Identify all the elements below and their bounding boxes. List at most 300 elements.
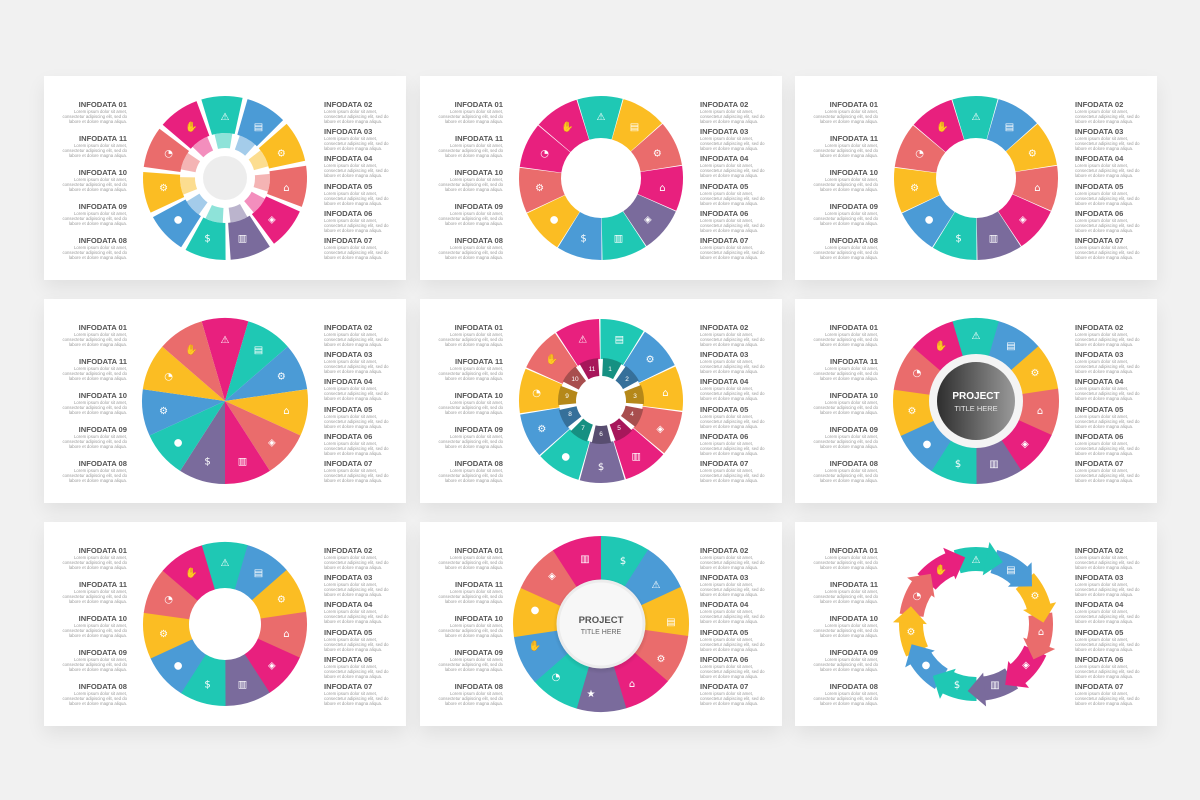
panel: card 6 project dark: Lorem ipsum dolor sit amet, xyxy=(825,332,878,337)
center: project title dark xyxy=(929,354,1023,448)
icons: wheel segments: $ xyxy=(204,234,211,244)
panel: card 3 chevron ring: consectetur adipiscing elit, sed do xyxy=(1075,223,1140,228)
icons: puzzle segments: ⚠ xyxy=(652,580,661,591)
panel: card 5 numbered ring: labore et dolore magna aliqua. xyxy=(445,444,503,449)
panel: card 6 project dark: labore et dolore magna aliqua. xyxy=(820,342,878,347)
panel: card 4 pie: INFODATA 03 xyxy=(324,350,372,359)
panel: card 1 wheel: consectetur adipiscing elit, sed do xyxy=(324,141,388,146)
panel: card 7 puzzle ring: consectetur adipiscing elit, sed do xyxy=(324,696,388,701)
panel: card 4 pie: INFODATA 10 xyxy=(79,391,127,400)
panel: card 9 arrow cycle: INFODATA 06 xyxy=(1075,655,1123,664)
panel: card 5 numbered ring: INFODATA 10 xyxy=(455,391,503,400)
panel: card 9 arrow cycle: INFODATA 05 xyxy=(1075,628,1123,637)
panel: card 1 wheel: INFODATA 07 xyxy=(324,236,372,245)
panel: card 1 wheel: labore et dolore magna aliqua. xyxy=(324,173,382,178)
chart: puzzle ring with white center xyxy=(512,536,690,712)
icons: chevron segments: ▤ xyxy=(1005,122,1014,133)
panel: card 5 numbered ring: consectetur adipiscing elit, sed do xyxy=(438,371,503,376)
panel: card 7 puzzle ring: Lorem ipsum dolor sit amet, xyxy=(324,691,377,696)
panel: card 9 arrow cycle: Lorem ipsum dolor sit amet, xyxy=(1075,637,1128,642)
icons: pie segments: ● xyxy=(174,438,183,449)
panel: card 7 puzzle ring: labore et dolore magna aliqua. xyxy=(324,592,382,597)
panel: card 1 wheel: consectetur adipiscing elit, sed do xyxy=(62,250,127,255)
icons: puzzle segments: ◈ xyxy=(548,571,556,582)
panel: card 1 wheel: Lorem ipsum dolor sit amet, xyxy=(324,218,377,223)
panel: card 9 arrow cycle: Lorem ipsum dolor sit amet, xyxy=(1075,691,1128,696)
panel: card 1 wheel: labore et dolore magna aliqua. xyxy=(69,119,127,124)
panel: card 9 arrow cycle: Lorem ipsum dolor sit amet, xyxy=(825,657,878,662)
panel: card 3 chevron ring: consectetur adipiscing elit, sed do xyxy=(1075,114,1140,119)
panel: card 6 project dark: labore et dolore magna aliqua. xyxy=(1075,342,1133,347)
panel: card 2 donut: INFODATA 11 xyxy=(455,134,503,143)
panel: card 4 pie: labore et dolore magna aliqua. xyxy=(324,369,382,374)
panel: card 8 puzzle with project title: INFODATA 04 xyxy=(700,600,748,609)
panel: card 3 chevron ring: INFODATA 06 xyxy=(1075,209,1123,218)
panel: card 8 puzzle with project title: consectetur adipiscing elit, sed do xyxy=(438,594,503,599)
icons: numbered segments: ▤ xyxy=(615,335,624,346)
panel: card 6 project dark: INFODATA 11 xyxy=(830,357,878,366)
icons: numbered segments: ◈ xyxy=(656,424,664,435)
panel: card 4 pie: consectetur adipiscing elit, sed do xyxy=(62,473,127,478)
panel: card 3 chevron ring: INFODATA 01 xyxy=(830,100,878,109)
panel: card 4 pie: consectetur adipiscing elit, sed do xyxy=(62,337,127,342)
center: project title dark: PROJECT xyxy=(952,391,1000,402)
panel: card 6 project dark: consectetur adipiscing elit, sed do xyxy=(1075,337,1140,342)
icons: donut segments: ⚙ xyxy=(535,183,544,194)
chart: numbered ring xyxy=(518,319,684,483)
panel: card 7 puzzle ring: INFODATA 02 xyxy=(324,546,372,555)
panel: card 4 pie: INFODATA 01 xyxy=(79,323,127,332)
panel: card 5 numbered ring: INFODATA 11 xyxy=(455,357,503,366)
panel: card 6 project dark: Lorem ipsum dolor sit amet, xyxy=(1075,414,1128,419)
panel: card 7 puzzle ring: consectetur adipiscing elit, sed do xyxy=(324,560,388,565)
panel: card 5 numbered ring: Lorem ipsum dolor sit amet, xyxy=(700,414,753,419)
panel: card 9 arrow cycle: consectetur adipiscing elit, sed do xyxy=(814,696,878,701)
icons: puzzle segments: ⚠ xyxy=(221,558,230,569)
panel: card 1 wheel: labore et dolore magna aliqua. xyxy=(324,255,382,260)
panel: card 2 donut: Lorem ipsum dolor sit amet, xyxy=(700,191,753,196)
panel: card 7 puzzle ring: consectetur adipiscing elit, sed do xyxy=(324,642,388,647)
panel: card 8 puzzle with project title: labore et dolore magna aliqua. xyxy=(445,633,503,638)
panel: card 3 chevron ring: consectetur adipiscing elit, sed do xyxy=(814,114,878,119)
panel: card 2 donut: Lorem ipsum dolor sit amet, xyxy=(700,218,753,223)
panel: card 2 donut: Lorem ipsum dolor sit amet, xyxy=(700,163,753,168)
numbers: segment indices: 5 xyxy=(617,425,621,432)
panel: card 3 chevron ring: consectetur adipiscing elit, sed do xyxy=(1075,196,1140,201)
panel: card 4 pie: labore et dolore magna aliqua. xyxy=(69,444,127,449)
icons: pie segments: $ xyxy=(204,456,211,468)
icons: numbered segments: ◔ xyxy=(532,388,541,399)
panel: card 5 numbered ring: Lorem ipsum dolor sit amet, xyxy=(700,332,753,337)
panel: card 7 puzzle ring: labore et dolore magna aliqua. xyxy=(69,667,127,672)
panel: card 6 project dark: INFODATA 10 xyxy=(830,391,878,400)
panel: card 2 donut: labore et dolore magna aliqua. xyxy=(700,228,758,233)
panel: card 1 wheel: Lorem ipsum dolor sit amet, xyxy=(324,136,377,141)
panel: card 4 pie: labore et dolore magna aliqua. xyxy=(69,342,127,347)
icons: arrow segments: ◈ xyxy=(1022,660,1030,671)
panel: card 2 donut xyxy=(420,76,782,280)
icons: chevron segments: ⚠ xyxy=(972,112,981,123)
panel: card 7 puzzle ring: labore et dolore magna aliqua. xyxy=(69,599,127,604)
panel: card 3 chevron ring: labore et dolore magna aliqua. xyxy=(1075,228,1133,233)
icons: puzzle segments: ▤ xyxy=(254,568,263,579)
icons: arrow segments: ▥ xyxy=(990,680,1000,691)
panel: card 4 pie: INFODATA 11 xyxy=(79,357,127,366)
panel: card 5 numbered ring: consectetur adipiscing elit, sed do xyxy=(700,473,764,478)
panel: card 4 pie: INFODATA 05 xyxy=(324,405,372,414)
panel: card 3 chevron ring: Lorem ipsum dolor sit amet, xyxy=(825,143,878,148)
panel: card 8 puzzle with project title: INFODATA 10 xyxy=(455,614,503,623)
panel: card 8 puzzle with project title: Lorem ipsum dolor sit amet, xyxy=(700,664,753,669)
icons: wheel segments: ● xyxy=(174,215,183,226)
panel: card 6 project dark: labore et dolore magna aliqua. xyxy=(1075,451,1133,456)
icons: ring segments: ▥ xyxy=(989,459,999,470)
panel: card 6 project dark: INFODATA 05 xyxy=(1075,405,1123,414)
icons: donut segments: ⌂ xyxy=(659,183,666,194)
text block: left items xyxy=(814,100,878,260)
panel: card 8 puzzle with project title: INFODATA 02 xyxy=(700,546,748,555)
panel: card 9 arrow cycle: INFODATA 09 xyxy=(830,648,878,657)
panel: card 7 puzzle ring: INFODATA 10 xyxy=(79,614,127,623)
panel: card 8 puzzle with project title: labore et dolore magna aliqua. xyxy=(700,674,758,679)
panel: card 7 puzzle ring: labore et dolore magna aliqua. xyxy=(324,701,382,706)
panel: card 7 puzzle ring: INFODATA 06 xyxy=(324,655,372,664)
panel: card 7 puzzle ring: Lorem ipsum dolor sit amet, xyxy=(74,691,127,696)
panel: card 8 puzzle with project title: consectetur adipiscing elit, sed do xyxy=(438,628,503,633)
icons: donut segments: ◔ xyxy=(540,148,549,159)
panel: card 2 donut: INFODATA 03 xyxy=(700,127,748,136)
panel: card 9 arrow cycle: Lorem ipsum dolor sit amet, xyxy=(825,589,878,594)
icons: arrow segments: ⚙ xyxy=(907,627,915,638)
panel: card 9 arrow cycle: labore et dolore magna aliqua. xyxy=(820,565,878,570)
text block: right items xyxy=(1075,546,1140,706)
icons: ring segments: $ xyxy=(955,459,961,470)
panel: card 8 puzzle with project title: Lorem ipsum dolor sit amet, xyxy=(700,691,753,696)
panel: card 8 puzzle with project title: labore et dolore magna aliqua. xyxy=(700,592,758,597)
text block: left items xyxy=(62,323,127,483)
panel: card 9 arrow cycle: Lorem ipsum dolor sit amet, xyxy=(825,691,878,696)
icons: donut segments: ⚠ xyxy=(597,112,606,123)
panel: card 8 puzzle with project title: labore et dolore magna aliqua. xyxy=(700,619,758,624)
panel: card 3 chevron ring: labore et dolore magna aliqua. xyxy=(1075,173,1133,178)
icons: pie segments: ⚠ xyxy=(221,335,230,346)
panel: card 5 numbered ring: labore et dolore magna aliqua. xyxy=(700,478,758,483)
panel: card 2 donut: consectetur adipiscing elit, sed do xyxy=(700,196,764,201)
panel: card 9 arrow cycle: INFODATA 07 xyxy=(1075,682,1123,691)
panel: card 1 wheel: Lorem ipsum dolor sit amet, xyxy=(74,109,127,114)
panel: card 3 chevron ring: labore et dolore magna aliqua. xyxy=(820,119,878,124)
icons: wheel segments: ▥ xyxy=(238,234,247,244)
panel: card 9 arrow cycle: labore et dolore magna aliqua. xyxy=(820,701,878,706)
panel: card 1 wheel: Lorem ipsum dolor sit amet, xyxy=(324,109,377,114)
panel: card 2 donut: consectetur adipiscing elit, sed do xyxy=(438,182,503,187)
panel: card 9 arrow cycle: labore et dolore magna aliqua. xyxy=(820,667,878,672)
panel: card 8 puzzle with project title: labore et dolore magna aliqua. xyxy=(445,599,503,604)
icons: puzzle segments: ⌂ xyxy=(283,629,290,640)
panel: card 4 pie: labore et dolore magna aliqua. xyxy=(69,478,127,483)
panel: card 8 puzzle with project title: INFODATA 03 xyxy=(700,573,748,582)
panel: card 6 project dark: consectetur adipiscing elit, sed do xyxy=(1075,473,1140,478)
panel: card 1 wheel: INFODATA 06 xyxy=(324,209,372,218)
panel: card 4 pie: consectetur adipiscing elit, sed do xyxy=(324,391,388,396)
icons: puzzle segments: ◔ xyxy=(552,672,560,683)
icons: ring segments: ✋ xyxy=(935,339,947,352)
panel: card 2 donut: Lorem ipsum dolor sit amet, xyxy=(700,245,753,250)
panel: card 4 pie: consectetur adipiscing elit, sed do xyxy=(324,419,388,424)
panel: card 7 puzzle ring: INFODATA 08 xyxy=(79,682,127,691)
panel: card 9 arrow cycle: consectetur adipiscing elit, sed do xyxy=(1075,560,1140,565)
panel: card 8 puzzle with project title: INFODATA 08 xyxy=(455,682,503,691)
panel: card 5 numbered ring: INFODATA 04 xyxy=(700,377,748,386)
panel: card 2 donut: consectetur adipiscing elit, sed do xyxy=(700,223,764,228)
panel: card 5 numbered ring: labore et dolore magna aliqua. xyxy=(700,342,758,347)
panel: card 2 donut: INFODATA 10 xyxy=(455,168,503,177)
numbers: segment indices: 10 xyxy=(571,376,579,383)
text block: left items xyxy=(438,100,503,260)
panel: card 6 project dark: labore et dolore magna aliqua. xyxy=(820,410,878,415)
panel: card 3 chevron ring: Lorem ipsum dolor sit amet, xyxy=(825,211,878,216)
panel: card 3 chevron ring: consectetur adipiscing elit, sed do xyxy=(1075,141,1140,146)
icons: wheel segments: ◔ xyxy=(164,148,173,159)
panel: card 4 pie: labore et dolore magna aliqua. xyxy=(324,424,382,429)
icons: pie segments: ⚙ xyxy=(277,371,286,382)
icons: donut segments xyxy=(535,112,666,244)
panel: card 9 arrow cycle: Lorem ipsum dolor sit amet, xyxy=(825,623,878,628)
panel: card 7 puzzle ring: consectetur adipiscing elit, sed do xyxy=(62,662,127,667)
panel: card 8 puzzle with project title: consectetur adipiscing elit, sed do xyxy=(700,560,764,565)
panel: card 7 puzzle ring: Lorem ipsum dolor sit amet, xyxy=(74,623,127,628)
panel: card 5 numbered ring: Lorem ipsum dolor sit amet, xyxy=(700,441,753,446)
icons: ring segments: ⚙ xyxy=(1031,368,1039,379)
panel: card 9 arrow cycle: labore et dolore magna aliqua. xyxy=(1075,674,1133,679)
panel: card 1 wheel: consectetur adipiscing elit, sed do xyxy=(324,196,388,201)
panel: card 8 puzzle with project title: INFODATA 05 xyxy=(700,628,748,637)
panel: card 4 pie: consectetur adipiscing elit, sed do xyxy=(62,405,127,410)
icons: arrow segments: ▤ xyxy=(1006,565,1016,576)
panel: card 3 chevron ring: Lorem ipsum dolor sit amet, xyxy=(825,245,878,250)
panel: card 5 numbered ring: consectetur adipiscing elit, sed do xyxy=(700,364,764,369)
panel: card 2 donut: consectetur adipiscing elit, sed do xyxy=(438,148,503,153)
panel: card 5 numbered ring: labore et dolore magna aliqua. xyxy=(445,410,503,415)
icons: chevron segments: ⌂ xyxy=(1034,183,1041,194)
icons: arrow segments: ◔ xyxy=(913,591,921,602)
panel: card 6 project dark: consectetur adipiscing elit, sed do xyxy=(1075,391,1140,396)
panel: card 5 numbered ring: labore et dolore magna aliqua. xyxy=(700,424,758,429)
panel: card 6 project dark: INFODATA 09 xyxy=(830,425,878,434)
text block: right items xyxy=(324,100,388,260)
panel: card 5 numbered ring: Lorem ipsum dolor sit amet, xyxy=(450,400,503,405)
panel: card 2 donut: labore et dolore magna aliqua. xyxy=(445,153,503,158)
panel: card 7 puzzle ring: labore et dolore magna aliqua. xyxy=(324,565,382,570)
panel: card 5 numbered ring: labore et dolore magna aliqua. xyxy=(445,376,503,381)
panel: card 5 numbered ring: Lorem ipsum dolor sit amet, xyxy=(450,366,503,371)
icons: numbered segments: ● xyxy=(561,452,570,463)
panel: card 9 arrow cycle: Lorem ipsum dolor sit amet, xyxy=(1075,609,1128,614)
icons: ring segments: ⌂ xyxy=(1037,406,1043,417)
panel: card 7 puzzle ring: labore et dolore magna aliqua. xyxy=(324,674,382,679)
panel: card 4 pie: Lorem ipsum dolor sit amet, xyxy=(324,441,377,446)
panel: card 4 pie: Lorem ipsum dolor sit amet, xyxy=(324,468,377,473)
numbers: segment indices: 11 xyxy=(589,366,596,373)
panel: card 1 wheel: consectetur adipiscing elit, sed do xyxy=(324,250,388,255)
panel: card 8 puzzle with project title: consectetur adipiscing elit, sed do xyxy=(438,560,503,565)
panel: card 1 wheel: INFODATA 02 xyxy=(324,100,372,109)
panel: card 6 project dark: labore et dolore magna aliqua. xyxy=(1075,369,1133,374)
icons: puzzle segments xyxy=(529,554,676,700)
panel: card 6 project dark: consectetur adipiscing elit, sed do xyxy=(814,439,878,444)
panel: card 7 puzzle ring: consectetur adipiscing elit, sed do xyxy=(62,560,127,565)
panel: card 3 chevron ring: INFODATA 02 xyxy=(1075,100,1123,109)
panel: card 3 chevron ring: labore et dolore magna aliqua. xyxy=(820,221,878,226)
panel: card 9 arrow cycle: Lorem ipsum dolor sit amet, xyxy=(1075,664,1128,669)
panel: card 7 puzzle ring: INFODATA 01 xyxy=(79,546,127,555)
panel: card 3 chevron ring: consectetur adipiscing elit, sed do xyxy=(1075,168,1140,173)
panel: card 2 donut: consectetur adipiscing elit, sed do xyxy=(438,216,503,221)
panel: card 2 donut: consectetur adipiscing elit, sed do xyxy=(438,114,503,119)
panel: card 4 pie: INFODATA 06 xyxy=(324,432,372,441)
panel: card 4 pie: labore et dolore magna aliqua. xyxy=(69,376,127,381)
panel: card 7 puzzle ring: INFODATA 03 xyxy=(324,573,372,582)
panel: card 5 numbered ring: consectetur adipiscing elit, sed do xyxy=(438,473,503,478)
panel: card 9 arrow cycle: labore et dolore magna aliqua. xyxy=(1075,619,1133,624)
panel: card 1 wheel: labore et dolore magna aliqua. xyxy=(69,187,127,192)
chart: full pie xyxy=(142,318,308,484)
panel: card 4 pie: Lorem ipsum dolor sit amet, xyxy=(74,332,127,337)
panel: card 7 puzzle ring: labore et dolore magna aliqua. xyxy=(324,647,382,652)
panel: card 9 arrow cycle: labore et dolore magna aliqua. xyxy=(1075,647,1133,652)
text block: left items xyxy=(814,323,878,483)
panel: card 3 chevron ring: Lorem ipsum dolor sit amet, xyxy=(1075,163,1128,168)
icons: chevron segments xyxy=(910,112,1041,244)
panel: card 7 puzzle ring: INFODATA 09 xyxy=(79,648,127,657)
panel: card 9 arrow cycle: Lorem ipsum dolor sit amet, xyxy=(1075,555,1128,560)
panel: card 8 puzzle with project title: labore et dolore magna aliqua. xyxy=(445,701,503,706)
panel: card 3 chevron ring: Lorem ipsum dolor sit amet, xyxy=(825,109,878,114)
text block: right items xyxy=(1075,100,1140,260)
panel: card 5 numbered ring: Lorem ipsum dolor sit amet, xyxy=(700,386,753,391)
panel: card 9 arrow cycle: consectetur adipiscing elit, sed do xyxy=(1075,669,1140,674)
panel: card 2 donut: INFODATA 05 xyxy=(700,182,748,191)
panel: card 4 pie: Lorem ipsum dolor sit amet, xyxy=(74,468,127,473)
panel: card 5 numbered ring: INFODATA 06 xyxy=(700,432,748,441)
panel: card 7 puzzle ring: Lorem ipsum dolor sit amet, xyxy=(74,657,127,662)
panel: card 8 puzzle with project title: Lorem ipsum dolor sit amet, xyxy=(450,691,503,696)
chart: arrow cycle ring xyxy=(893,542,1056,706)
panel: card 3 chevron ring: Lorem ipsum dolor sit amet, xyxy=(1075,191,1128,196)
icons: chevron segments: ◔ xyxy=(915,148,924,159)
panel: card 8 puzzle with project title: Lorem ipsum dolor sit amet, xyxy=(450,657,503,662)
panel: card 6 project dark: labore et dolore magna aliqua. xyxy=(1075,424,1133,429)
panel: card 4 pie: Lorem ipsum dolor sit amet, xyxy=(74,434,127,439)
icons: puzzle segments: ⚙ xyxy=(657,654,665,665)
icons: arrow segments xyxy=(907,555,1044,691)
panel: card 2 donut: labore et dolore magna aliqua. xyxy=(700,255,758,260)
panel: card 1 wheel: consectetur adipiscing elit, sed do xyxy=(324,114,388,119)
panel: card 7 puzzle ring: labore et dolore magna aliqua. xyxy=(69,565,127,570)
panel: card 4 pie: consectetur adipiscing elit, sed do xyxy=(324,473,388,478)
panel: card 6 project dark: consectetur adipiscing elit, sed do xyxy=(814,371,878,376)
icons: numbered segments: ✋ xyxy=(546,352,558,365)
icons: numbered segments: ▥ xyxy=(631,452,641,463)
chart: puzzle ring xyxy=(142,542,307,706)
icons: puzzle segments: ✋ xyxy=(529,639,541,652)
panel: card 9 arrow cycle: Lorem ipsum dolor sit amet, xyxy=(825,555,878,560)
panel: card 8 puzzle with project title: Lorem ipsum dolor sit amet, xyxy=(450,623,503,628)
icons: ring segments: ⚙ xyxy=(908,406,916,417)
panel: card 4 pie: Lorem ipsum dolor sit amet, xyxy=(74,366,127,371)
panel: card 3 chevron ring: consectetur adipiscing elit, sed do xyxy=(814,182,878,187)
icons: puzzle segments xyxy=(159,558,290,690)
panel: card 7 puzzle ring: Lorem ipsum dolor sit amet, xyxy=(324,582,377,587)
panel: card 6 project dark: labore et dolore magna aliqua. xyxy=(820,444,878,449)
center: project title dark: TITLE HERE xyxy=(954,404,998,413)
panel: card 1 wheel: consectetur adipiscing elit, sed do xyxy=(324,223,388,228)
panel: card 3 chevron ring: Lorem ipsum dolor sit amet, xyxy=(1075,136,1128,141)
panel: card 1 wheel: Lorem ipsum dolor sit amet, xyxy=(74,143,127,148)
panel: card 1 wheel: Lorem ipsum dolor sit amet, xyxy=(324,245,377,250)
panel: card 7 puzzle ring: consectetur adipiscing elit, sed do xyxy=(62,594,127,599)
panel: card 7 puzzle ring: consectetur adipiscing elit, sed do xyxy=(324,614,388,619)
panel: card 9 arrow cycle: INFODATA 10 xyxy=(830,614,878,623)
icons: puzzle segments: ⚙ xyxy=(159,629,168,640)
panel: card 6 project dark: INFODATA 03 xyxy=(1075,350,1123,359)
center: project title white: PROJECT xyxy=(579,615,624,626)
numbers: segment indices: 1 xyxy=(608,366,612,373)
panel: card 7 puzzle ring: consectetur adipiscing elit, sed do xyxy=(324,587,388,592)
panel: card 9 arrow cycle: consectetur adipiscing elit, sed do xyxy=(814,560,878,565)
panel: card 6 project dark: labore et dolore magna aliqua. xyxy=(820,376,878,381)
panel: card 5 numbered ring: Lorem ipsum dolor sit amet, xyxy=(450,332,503,337)
panel: card 4 pie: Lorem ipsum dolor sit amet, xyxy=(324,359,377,364)
icons: donut segments: ▤ xyxy=(630,122,639,133)
icons: ring segments: ◔ xyxy=(913,368,921,379)
center: project title white: TITLE HERE xyxy=(581,629,622,636)
icons: ring segments: ◈ xyxy=(1021,439,1029,450)
panel: card 2 donut: INFODATA 01 xyxy=(455,100,503,109)
icons: ring segments: ▤ xyxy=(1006,341,1016,352)
panel: card 1 wheel: INFODATA 08 xyxy=(79,236,127,245)
panel: card 2 donut: consectetur adipiscing elit, sed do xyxy=(700,250,764,255)
panel: card 3 chevron ring: consectetur adipiscing elit, sed do xyxy=(814,216,878,221)
panel: card 1 wheel: Lorem ipsum dolor sit amet, xyxy=(74,211,127,216)
numbers: segment indices: 8 xyxy=(568,411,572,418)
panel: card 3 chevron ring: consectetur adipiscing elit, sed do xyxy=(1075,250,1140,255)
panel: card 9 arrow cycle: Lorem ipsum dolor sit amet, xyxy=(1075,582,1128,587)
chart: segmented wheel xyxy=(143,96,307,260)
panel: card 7 puzzle ring: Lorem ipsum dolor sit amet, xyxy=(324,555,377,560)
panel: card 9 arrow cycle: consectetur adipiscing elit, sed do xyxy=(814,628,878,633)
panel: card 7 puzzle ring: INFODATA 05 xyxy=(324,628,372,637)
icons: puzzle segments: ⌂ xyxy=(629,679,635,690)
panel: card 4 pie: Lorem ipsum dolor sit amet, xyxy=(324,414,377,419)
icons: wheel segments: ▤ xyxy=(254,122,263,133)
panel: card 1 wheel: labore et dolore magna aliqua. xyxy=(69,221,127,226)
panel: card 2 donut: labore et dolore magna aliqua. xyxy=(445,255,503,260)
panel: card 8 puzzle with project title: Lorem ipsum dolor sit amet, xyxy=(700,609,753,614)
icons: donut segments: ✋ xyxy=(561,120,574,133)
icons: chevron segments: ⚙ xyxy=(910,183,919,194)
panel: card 3 chevron ring: INFODATA 04 xyxy=(1075,154,1123,163)
panel: card 6 project dark: consectetur adipiscing elit, sed do xyxy=(1075,364,1140,369)
panel: card 2 donut: consectetur adipiscing elit, sed do xyxy=(700,168,764,173)
panel: card 5 numbered ring: labore et dolore magna aliqua. xyxy=(700,396,758,401)
panel: card 4 pie: INFODATA 07 xyxy=(324,459,372,468)
panel: card 9 arrow cycle: consectetur adipiscing elit, sed do xyxy=(1075,696,1140,701)
panel: card 5 numbered ring: consectetur adipiscing elit, sed do xyxy=(700,419,764,424)
panel: card 1 wheel: INFODATA 03 xyxy=(324,127,372,136)
panel: card 5 numbered ring: consectetur adipiscing elit, sed do xyxy=(438,405,503,410)
panel: card 9 arrow cycle: INFODATA 08 xyxy=(830,682,878,691)
